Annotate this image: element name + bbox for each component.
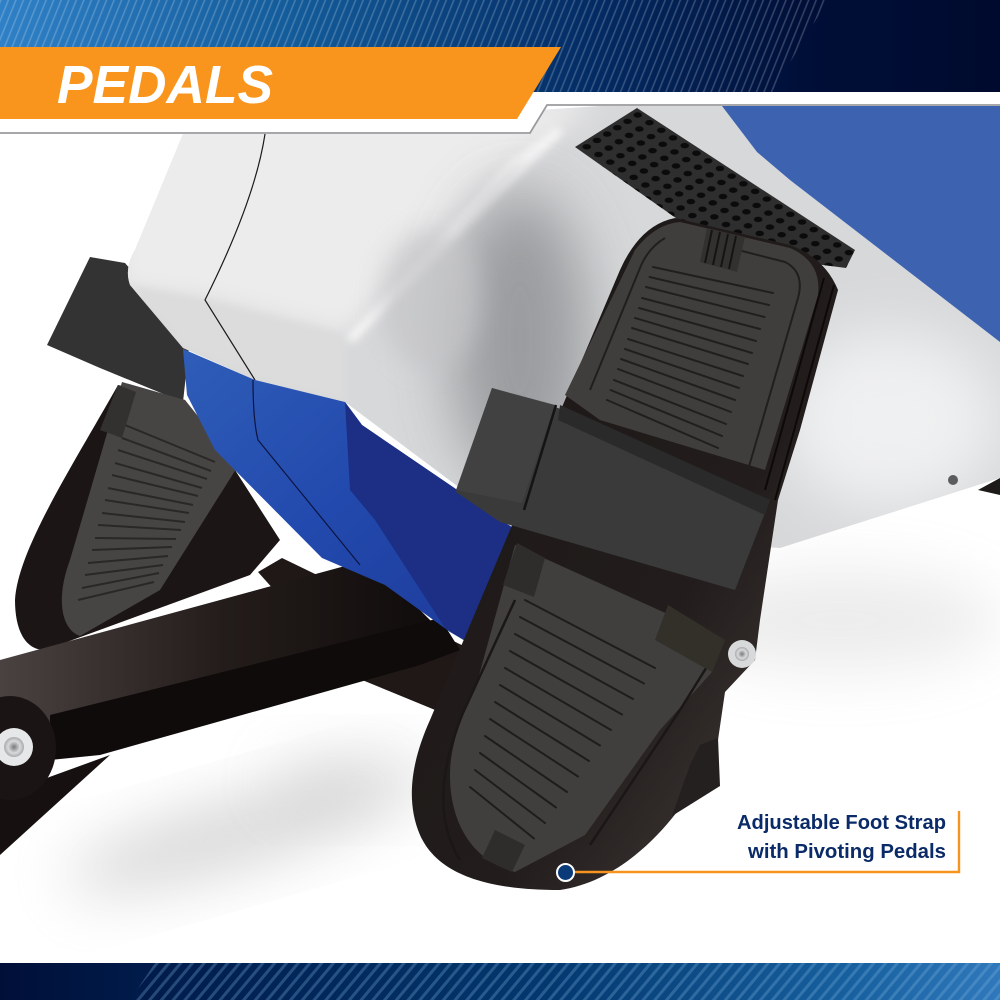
bottom band [0,963,1000,1000]
foot strap [456,388,770,590]
pedal bracket [672,738,720,816]
top header band [0,0,1000,92]
right pedal [412,218,838,890]
arm [0,566,430,722]
callout: adjustable foot strap: with Pivoting Pedals [747,841,946,863]
left pedal ribs [78,425,215,600]
silver body [128,106,1000,548]
callout: adjustable foot strap: Adjustable Foot Strap [737,812,946,834]
speaker grille [575,108,855,268]
pedal plate [412,218,838,890]
white frame under header [0,92,1000,133]
pedal bolt [728,640,756,668]
title: PEDALS [57,55,273,115]
orange title banner [0,47,561,119]
lower pedal pad [450,545,725,872]
floor shadows [57,570,1000,915]
blue upper panel [722,106,1000,342]
left pedal [15,382,280,650]
arm hub and bolt [0,696,56,800]
upper pedal ribs [607,267,773,448]
left foot strap [47,257,190,402]
blue lower housing [183,349,516,645]
cross beam [258,558,472,712]
callout: adjustable foot strap [557,811,959,881]
